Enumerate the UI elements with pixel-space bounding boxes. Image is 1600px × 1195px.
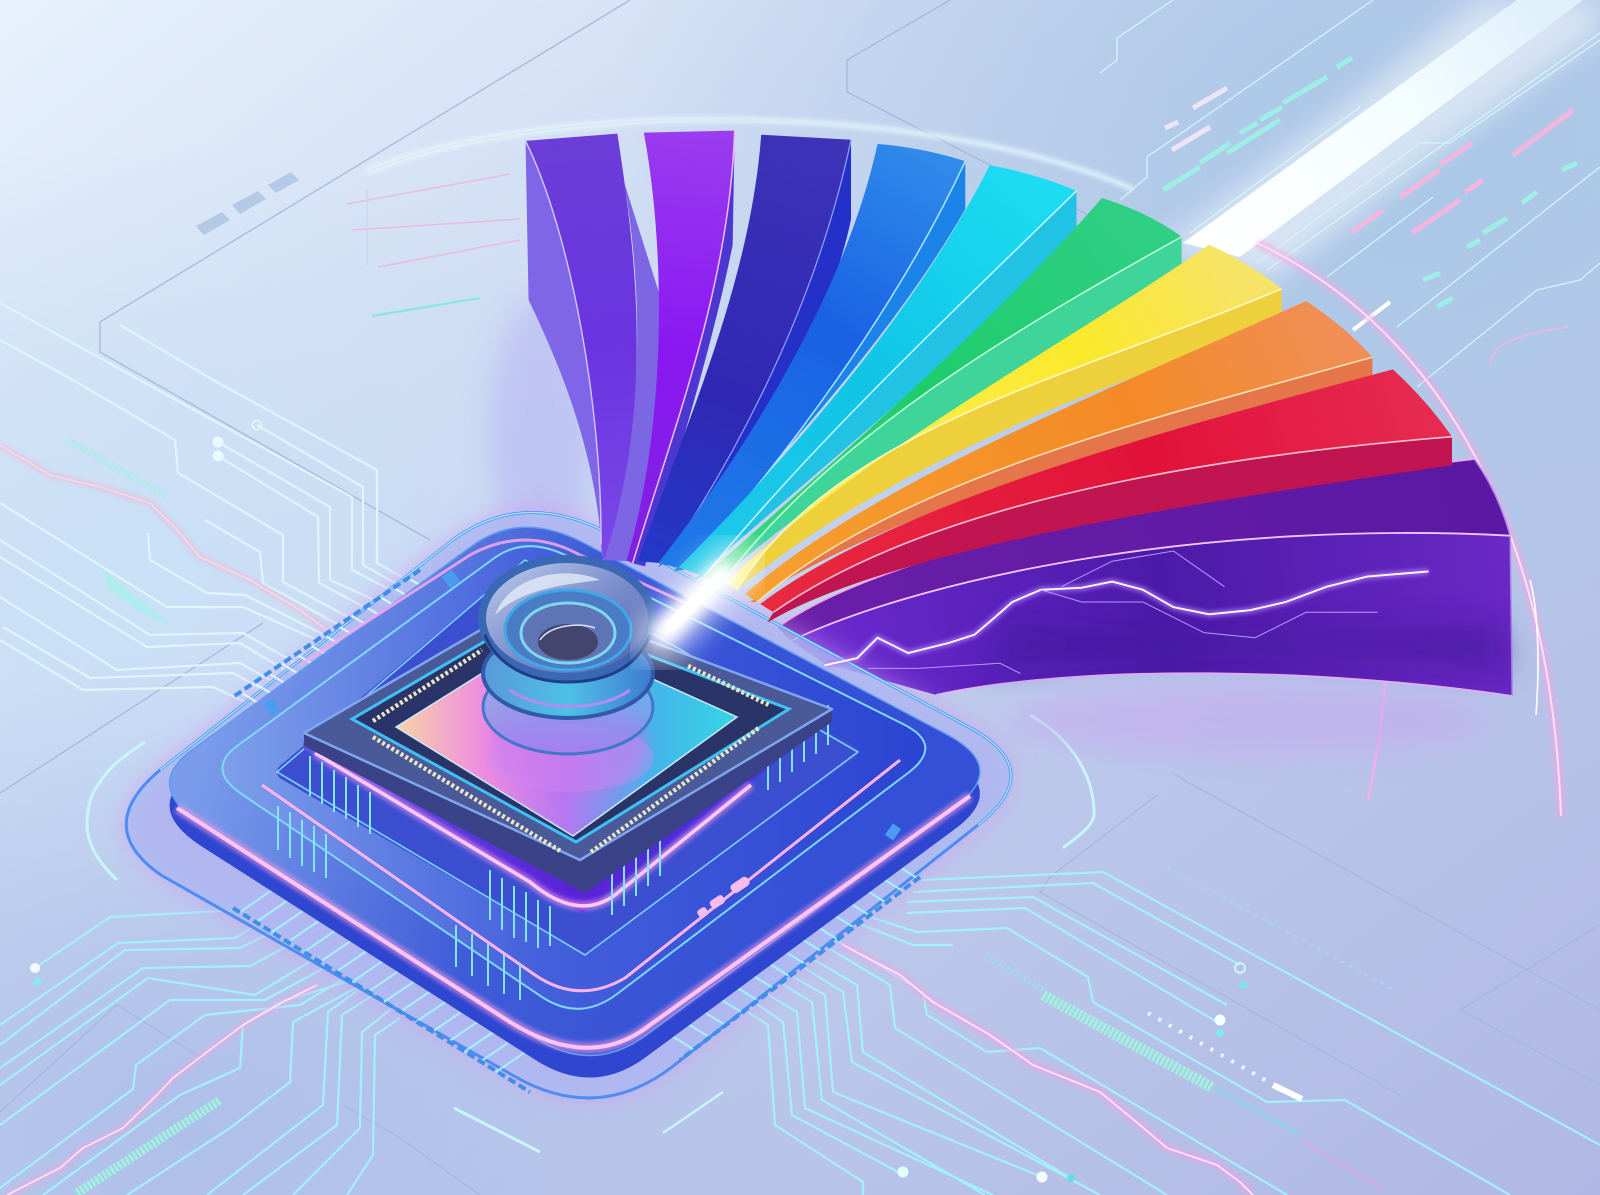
base plate side — [170, 549, 980, 1078]
outer glass plate — [126, 513, 1011, 1098]
dashes top-left — [196, 172, 299, 235]
plinth — [285, 570, 850, 945]
block wall — [310, 610, 825, 905]
lens inner ring — [521, 603, 615, 663]
ribbon: red — [760, 369, 1452, 622]
top pink arc — [300, 540, 690, 665]
ribbon: yellow — [727, 245, 1282, 592]
frame — [304, 598, 832, 860]
ribbon: deep violet — [778, 459, 1512, 696]
soft glow behind fan — [490, 300, 1490, 758]
lens top ring — [482, 559, 652, 677]
chip indicator pads — [696, 875, 751, 919]
plate-edge dashed rails — [233, 570, 920, 1092]
trace group: lower-right — [710, 902, 1510, 1195]
lens middle element — [483, 628, 653, 718]
upper arc halo — [367, 120, 1133, 189]
upper neon glow — [315, 753, 751, 906]
left holographic streaks — [347, 174, 520, 316]
white flash between lens and fan — [660, 565, 735, 640]
inner rim highlight — [160, 513, 1011, 825]
lens reflection glow on sensor — [492, 695, 648, 795]
base plate top — [170, 527, 980, 1056]
trace group: upper-left — [0, 303, 420, 710]
white light beam — [1160, 0, 1600, 280]
lightning bolt — [824, 551, 1429, 673]
lens lower element — [483, 660, 653, 754]
lens faint base reflection — [486, 724, 654, 792]
chip module — [126, 513, 1011, 1098]
tier A — [222, 546, 925, 1009]
neon base line — [177, 796, 970, 1048]
ribbon: orange — [745, 301, 1372, 602]
sensor surface — [396, 632, 737, 836]
sensor bond pads — [373, 650, 769, 852]
lens pupil highlight — [540, 625, 595, 640]
spectral fan of ribbons — [526, 131, 1452, 673]
ribbon: blue — [658, 144, 965, 571]
mint data strips — [67, 440, 1395, 1193]
pink neon base glow — [177, 796, 970, 1048]
ribbon: cyan — [679, 165, 1077, 580]
lens top crescent — [495, 573, 600, 615]
trace nodes — [30, 420, 1247, 1182]
ribbon: green — [704, 198, 1182, 587]
data streaks upper right — [1100, 0, 1600, 387]
upper neon line — [315, 753, 751, 906]
inner dark frame — [352, 612, 789, 842]
pink orbit arc right — [1257, 243, 1561, 816]
lens assembly — [482, 559, 654, 792]
chip tooth lines — [240, 578, 917, 1072]
lens second ring — [505, 590, 631, 670]
edge tabs — [264, 570, 901, 841]
ribbon: indigo — [638, 135, 851, 567]
trace group: right — [907, 872, 1600, 1145]
lens pupil — [538, 624, 598, 660]
tier A pink line — [262, 760, 900, 991]
trace group: lower-left — [0, 882, 420, 1195]
lens middle lilac rim — [510, 690, 630, 706]
electric sparks on circuit board — [0, 445, 1385, 1195]
pin clusters — [278, 705, 828, 1000]
plinth outline — [277, 560, 858, 955]
frame side — [304, 709, 832, 893]
pink glow under chip — [126, 513, 1011, 1098]
ribbon: purple — [627, 131, 735, 566]
lens rim dark lower edge — [485, 635, 650, 682]
bright arc dashes around chip — [87, 715, 1094, 1152]
ribbon: violet — [526, 134, 663, 561]
circuit traces — [0, 303, 1600, 1195]
